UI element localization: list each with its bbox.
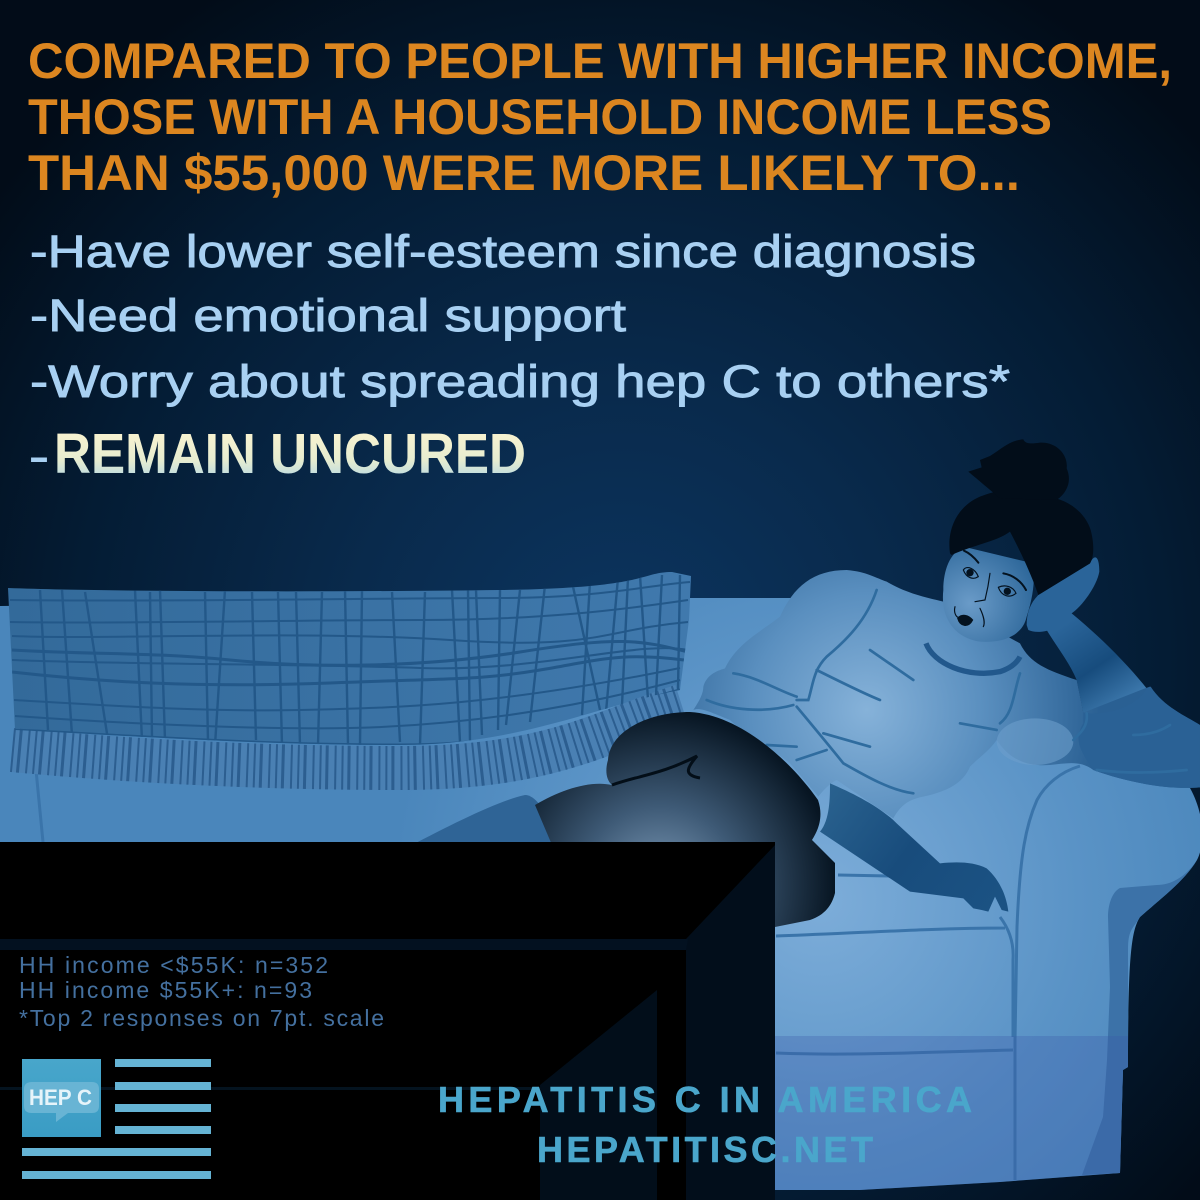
hand under head	[1027, 557, 1099, 632]
footer site name: HEPATITIS C IN AMERICA	[438, 1079, 972, 1120]
woman lying on couch	[693, 439, 1200, 912]
footer site name: HEPATITISC.NET	[537, 1129, 873, 1170]
tv frame	[0, 842, 775, 1200]
far leg	[412, 795, 552, 845]
hair bun	[968, 439, 1069, 500]
remain uncured: -	[29, 431, 49, 482]
tv lower facet	[540, 990, 657, 1200]
armrest front band	[1082, 860, 1197, 1175]
logo: hep c flag	[22, 1059, 211, 1179]
right sleeve	[1079, 687, 1200, 788]
sample size note: HH income <$55K: n=352	[19, 952, 328, 978]
list of findings	[30, 226, 1010, 407]
remain uncured: REMAIN UNCURED	[54, 422, 526, 486]
logo speech bubble	[24, 1082, 99, 1122]
armpit highlight	[997, 718, 1073, 765]
couch body	[0, 598, 1200, 1190]
near knee	[535, 712, 835, 927]
tv inner edge	[0, 939, 688, 950]
sample size note: *Top 2 responses on 7pt. scale	[19, 1005, 384, 1031]
sweater wrinkles	[707, 590, 1187, 793]
title: COMPARED TO PEOPLE WITH HIGHER INCOME,	[28, 33, 1172, 89]
hair	[949, 490, 1093, 595]
title	[28, 33, 1172, 201]
logo stripes	[22, 1059, 211, 1179]
sample size note	[19, 952, 384, 1031]
woman's forearm	[1047, 613, 1148, 717]
logo text: HEP C	[29, 1085, 92, 1110]
collar shadow	[926, 643, 1020, 673]
television	[0, 842, 775, 1200]
tv side facet	[686, 845, 775, 1200]
fringe	[12, 706, 682, 768]
list of findings: -Have lower self-esteem since diagnosis	[30, 226, 976, 277]
title: THAN $55,000 WERE MORE LIKELY TO...	[28, 145, 1020, 201]
bottom tint over couch	[775, 1036, 1114, 1190]
knee crease	[612, 756, 700, 785]
footer site name	[438, 1079, 972, 1170]
couch cushion lines	[36, 766, 1080, 1180]
facial features	[955, 551, 1026, 627]
woman's legs	[412, 712, 835, 927]
sample size note: HH income $55K+: n=93	[19, 977, 312, 1003]
list of findings: -Worry about spreading hep C to others*	[30, 356, 1010, 407]
list of findings: -Need emotional support	[30, 290, 627, 341]
blanket with fringe	[8, 572, 691, 768]
woman's lower arm and hand	[820, 783, 1008, 912]
sweater	[693, 570, 1200, 818]
couch	[0, 598, 1200, 1190]
face	[943, 547, 1034, 642]
title: THOSE WITH A HOUSEHOLD INCOME LESS	[28, 89, 1052, 145]
